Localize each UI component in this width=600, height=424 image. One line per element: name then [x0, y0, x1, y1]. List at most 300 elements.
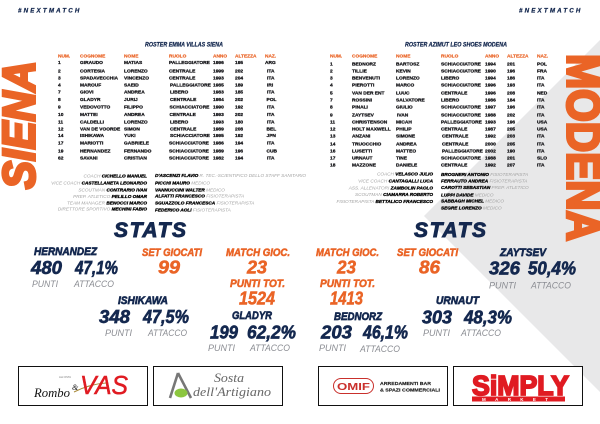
- roster table: Modena: HOLT MAXWELL: [352, 126, 391, 132]
- roster table: Modena: USA: [537, 126, 548, 132]
- roster table: Siena: 9: [58, 104, 61, 110]
- roster table: Modena: PALLEGGIATORE: [441, 119, 483, 125]
- roster table: Siena: 1993: [213, 76, 224, 82]
- roster table: Siena: GABRIELE: [124, 140, 150, 146]
- roster table: Modena: BENVENUTI: [352, 75, 381, 81]
- roster table: Modena: LUSETTI: [352, 148, 373, 154]
- staff list: Modena right: [441, 172, 529, 211]
- roster table: Modena: LUUC: [396, 90, 410, 96]
- roster table: Siena: 196: [235, 148, 243, 154]
- table header: Siena: RUOLO: [169, 53, 187, 59]
- player stat: Hernandez: ATTACCO: [73, 279, 114, 289]
- player stat: Ishikawa: PUNTI: [105, 328, 132, 338]
- staff list: Siena left: TEAM MANAGER BENOCCI MARCO: [67, 201, 147, 206]
- roster table: Modena: USA: [537, 119, 548, 125]
- roster table: Siena: 14: [58, 133, 64, 139]
- roster table: Siena: CENTRALE: [170, 97, 197, 103]
- roster table: Siena: 208: [235, 126, 243, 132]
- staff list: Siena left: DIRETTORE SPORTIVO MECHINI FABIO: [58, 207, 147, 212]
- team stat: Modena sets played: SET GIOCATI: [397, 247, 459, 259]
- roster table: Siena: 1996: [213, 60, 224, 66]
- table header: Siena: NUM.: [58, 53, 70, 59]
- roster table: Siena: 189: [235, 82, 243, 88]
- roster table: Modena: 8: [330, 104, 333, 110]
- team stat: Modena sets played: [397, 247, 459, 278]
- roster table: Modena: ITA: [537, 148, 545, 154]
- roster table: Siena: SIMON: [124, 126, 140, 132]
- roster table: Modena: LIBERO: [441, 75, 460, 81]
- roster table: Modena: 1987: [485, 126, 496, 132]
- player stat: Gladyr: 199: [210, 322, 238, 342]
- roster table: Modena: 7: [330, 97, 333, 103]
- roster table: Modena: 193: [507, 82, 515, 88]
- roster table: Siena: 1: [58, 60, 61, 66]
- roster table: Modena: 1994: [485, 75, 496, 81]
- table header: Siena: [58, 53, 276, 59]
- roster table: Siena: 202: [235, 68, 243, 74]
- roster table: Siena: POL: [266, 97, 276, 103]
- roster table: Modena: 1988: [485, 155, 496, 161]
- roster table: Modena: [330, 53, 548, 168]
- roster table: Siena: 204: [235, 76, 243, 82]
- roster table: Modena: ITA: [537, 75, 545, 81]
- sponsor logo: Simply Market: MARKET: [482, 397, 548, 402]
- player stat: Hernandez: HERNANDEZ: [34, 246, 98, 258]
- roster table: Siena: CORTESIA: [80, 68, 106, 74]
- roster table: Siena: LIBERO: [170, 90, 189, 96]
- roster table: Siena: ITA: [267, 104, 275, 110]
- roster table: Modena: LORENZO: [396, 75, 420, 81]
- staff list: Siena left: SCOUTMAN CONTRARIO IVAN: [78, 188, 148, 193]
- roster table: Siena: 1990: [213, 104, 224, 110]
- player stat: Ishikawa: [99, 295, 189, 338]
- table header: Modena: RUOLO: [441, 53, 459, 59]
- roster table: Siena: 180: [235, 120, 243, 126]
- roster table: Modena: ITA: [537, 97, 545, 103]
- player stat: Bednorz: [319, 311, 408, 354]
- roster table: Siena: 185: [235, 90, 243, 96]
- staff list: Siena right: [154, 173, 306, 213]
- roster table: Siena: [58, 53, 277, 161]
- stats heading: Modena: STATS: [414, 219, 486, 242]
- roster table: Modena: TILLIE: [352, 68, 368, 74]
- roster table: Siena: 1989: [213, 148, 224, 154]
- staff list: Modena right: SABBAGH MICHEL MEDICO: [441, 199, 504, 204]
- roster table: Siena: ITA: [267, 68, 275, 74]
- roster table: Siena: CENTRALE: [169, 76, 196, 82]
- player stat: Bednorz: BEDNORZ: [334, 311, 383, 323]
- roster table: Siena: GIRAUDO: [80, 60, 103, 66]
- sponsor logo: Sosta dell'Artigiano: [154, 366, 282, 406]
- roster table: Siena: HERNANDEZ: [80, 148, 110, 154]
- roster table: Siena: 17: [58, 140, 64, 146]
- team stat: Siena matches played: 23: [246, 258, 267, 278]
- roster table: Modena: 1986: [485, 97, 496, 103]
- team stat: Siena sets played: [142, 247, 203, 278]
- roster table: Siena: SAEID: [124, 82, 139, 88]
- roster table: Modena: 9: [330, 112, 333, 118]
- staff list: Modena left: FISIOTERAPISTA BETTALICO FRANCESCO: [336, 199, 433, 204]
- roster table: Siena: JURIJ: [124, 97, 138, 103]
- roster table: Siena: GLADYR: [80, 97, 101, 103]
- roster title: Modena: ROSTER AZIMUT LEO SHOES MODENA: [405, 43, 507, 49]
- roster table: Modena: TRUOCCHIO: [352, 141, 382, 147]
- player stat: Hernandez: 480: [30, 258, 62, 278]
- team stat: Modena sets played: 86: [419, 258, 441, 278]
- roster table: Siena: 19: [58, 148, 64, 154]
- roster table: Modena: 202: [507, 112, 515, 118]
- sponsor logo: OMIF: ARREDAMENTI BAR: [380, 381, 432, 386]
- roster table: Siena: MATIAS: [124, 60, 143, 66]
- player stat: Zaytsev: 326: [489, 258, 521, 278]
- roster table: Siena: CUB: [266, 148, 277, 154]
- table header: Modena: [330, 53, 548, 59]
- roster table: Siena: MATTEI: [80, 112, 98, 118]
- sponsor logo: Sosta dell'Artigiano: Sosta: [214, 370, 245, 385]
- roster table: Modena: GIULIO: [396, 104, 413, 110]
- roster table: Siena: IRI: [267, 82, 274, 88]
- table header: Modena: COGNOME: [352, 53, 378, 59]
- roster table: Modena: 14: [330, 141, 336, 147]
- sponsor logo: Simply Market: [454, 366, 582, 406]
- player stat: Bednorz: PUNTI: [319, 343, 346, 353]
- table header: Siena: NOME: [124, 53, 139, 59]
- roster table: Modena: CHRISTENSON: [352, 119, 388, 125]
- roster table: Modena: ZAYTSEV: [352, 112, 375, 118]
- player stat: Ishikawa: 47,5%: [142, 307, 189, 327]
- team stat: Siena sets played: SET GIOCATI: [142, 247, 203, 259]
- staff list: Siena left: [51, 174, 148, 212]
- roster table: Siena: 12: [58, 126, 64, 132]
- roster table: Modena: SIMONE: [396, 133, 416, 139]
- roster table: Modena: 207: [507, 162, 515, 168]
- roster table: Modena: CENTRALE: [441, 126, 468, 132]
- roster table: Modena: SALVATORE: [396, 97, 425, 103]
- roster table: Siena: VEDOVOTTO: [80, 104, 111, 110]
- roster table: Siena: 7: [58, 90, 61, 96]
- roster table: Siena: CENTRALE: [170, 112, 197, 118]
- roster table: Siena: 192: [235, 133, 243, 139]
- roster table: Modena: 203: [507, 133, 515, 139]
- roster table: Siena: SCHIACCIATORE: [169, 148, 210, 154]
- roster table: Siena: ARG: [265, 60, 276, 66]
- roster table: Modena: ITA: [537, 162, 545, 168]
- roster table: Modena: 1992: [485, 133, 496, 139]
- roster table: Modena: SCHIACCIATORE: [441, 68, 482, 74]
- roster table: Siena: PALLEGGIATORE: [170, 82, 212, 88]
- roster table: Modena: 2002: [485, 148, 496, 154]
- roster table: Siena: 202: [235, 112, 243, 118]
- team stat: Siena sets played: 99: [158, 258, 180, 278]
- roster table: Modena: 201: [507, 61, 515, 67]
- roster table: Siena: LORENZO: [124, 68, 148, 74]
- player stat: Ishikawa: ATTACCO: [147, 328, 187, 338]
- player stat: Urnaut: PUNTI: [423, 328, 450, 338]
- staff list: Siena left: PREP. ATLETICO PELILLO OMAR: [73, 194, 148, 199]
- player stat: Ishikawa: 348: [99, 307, 130, 327]
- roster table: Modena: 1990: [485, 68, 496, 74]
- roster table: Siena: VAN DE VOORDE: [80, 126, 121, 132]
- roster table: Modena: 4: [330, 82, 333, 88]
- roster table: Modena: 13: [330, 133, 336, 139]
- roster table: Siena: 11: [58, 120, 63, 126]
- roster table: Modena: 2: [330, 68, 333, 74]
- roster table: Modena: 196: [507, 119, 515, 125]
- roster table: Siena: CENTRALE: [169, 68, 196, 74]
- roster table: Modena: SCHIACCIATORE: [441, 104, 482, 110]
- roster table: Siena: SCHIACCIATORE: [170, 104, 210, 110]
- roster table: Modena: LIBERO: [441, 97, 460, 103]
- roster table: Siena: SAVANI: [80, 156, 98, 162]
- staff list: Siena right: VANNUCCINI WALTER MEDICO: [155, 188, 225, 193]
- team stat: Modena matches played: 23: [336, 258, 356, 278]
- team stat: Modena total points: [320, 278, 375, 308]
- roster table: Siena: CRISTIAN: [124, 156, 147, 162]
- roster table: Modena: URNAUT: [352, 155, 372, 161]
- table header: Modena: NAZ.: [537, 53, 548, 59]
- roster table: Siena: SCHIACCIATORE: [169, 140, 210, 146]
- staff list: Modena left: COACH VELASCO JULIO: [377, 172, 433, 177]
- roster table: Siena: ANDREA: [124, 90, 145, 96]
- staff list: Modena left: VICE COACH CANTAGALLI LUCA: [358, 179, 434, 184]
- sponsor logo: OMIF: OMIF: [337, 382, 370, 393]
- sponsor logo: Rombo & Vas: [18, 366, 148, 406]
- roster table: Modena: CENTRALE: [442, 141, 469, 147]
- roster table: Modena: 1994: [485, 61, 496, 67]
- hashtag left: #NEXTMATCH: [18, 8, 82, 15]
- roster table: Siena: FILIPPO: [124, 104, 143, 110]
- roster table: Siena: 2: [58, 68, 61, 74]
- sponsor logo: Rombo & Vas: &: [72, 383, 79, 392]
- sponsor logo: Sosta dell'Artigiano: dell'Artigiano: [193, 384, 272, 399]
- roster table: Modena: SCHIACCIATORE: [441, 112, 482, 118]
- roster table: Modena: 17: [330, 155, 336, 161]
- team stat: Siena total points: 1524: [239, 288, 275, 308]
- staff list: Modena right: CAROTTI SEBASTIAN PREP. ATLETICO: [441, 185, 529, 190]
- roster table: Siena: GIOVI: [80, 90, 94, 96]
- roster table: Modena: 1997: [485, 104, 496, 110]
- player stat: Gladyr: GLADYR: [232, 310, 272, 322]
- roster table: Modena: 5: [330, 90, 333, 96]
- roster table: Modena: FRA: [537, 68, 547, 74]
- player stat: Urnaut: 303: [422, 308, 452, 328]
- roster table: Modena: 184: [507, 97, 515, 103]
- roster table: Modena: MICAH: [396, 119, 412, 125]
- player stat: Bednorz: ATTACCO: [359, 344, 400, 354]
- roster table: Siena: 1995: [213, 133, 224, 139]
- roster table: Siena: 3: [58, 76, 61, 82]
- roster table: Siena: 1999: [213, 68, 224, 74]
- team stat: Siena total points: PUNTI TOT.: [230, 278, 285, 290]
- roster table: Modena: 205: [507, 126, 515, 132]
- roster table: Modena: 190: [507, 148, 515, 154]
- table header: Modena: ALTEZZA: [507, 53, 529, 59]
- roster table: Siena: 1983: [213, 90, 224, 96]
- roster table: Modena: CENTRALE: [441, 90, 468, 96]
- roster table: Modena: 196: [507, 68, 515, 74]
- roster table: Modena: 205: [507, 141, 515, 147]
- roster table: Modena: PINALI: [352, 104, 369, 110]
- team stat: Modena matches played: [316, 247, 379, 278]
- team stat: Siena matches played: [226, 247, 290, 278]
- roster table: Siena: LORENZO: [124, 120, 148, 126]
- roster table: Siena: 194: [235, 156, 243, 162]
- team stat: Siena total points: [230, 278, 285, 308]
- roster table: Siena: MARIOTTI: [80, 140, 104, 146]
- staff list: Modena right: FERRAUTO ANDREA FISIOTERAPISTA: [441, 179, 527, 184]
- roster table: Modena: ITA: [537, 104, 545, 110]
- roster table: Modena: MARCO: [396, 82, 415, 88]
- roster table: Siena: ISHIKAWA: [80, 133, 104, 139]
- player stat: Hernandez: [30, 246, 118, 289]
- table header: Modena: NUM.: [330, 53, 342, 59]
- roster table: Modena: SCHIACCIATORE: [441, 155, 482, 161]
- player stat: Urnaut: [422, 295, 512, 338]
- roster table: Siena: JPN: [266, 133, 276, 139]
- roster table: Siena: CENTRALE: [170, 126, 197, 132]
- player stat: Zaytsev: 50,4%: [528, 258, 576, 278]
- player stat: Zaytsev: ZAYTSEV: [499, 247, 548, 259]
- roster table: Modena: ANDREA: [396, 141, 417, 147]
- roster table: Modena: SCHIACCIATORE: [441, 82, 482, 88]
- roster table: Siena: 1982: [213, 156, 224, 162]
- roster table: Modena: TINE: [396, 155, 408, 161]
- roster table: Siena: 195: [235, 60, 243, 66]
- table header: Siena: ALTEZZA: [235, 53, 257, 59]
- roster table: Siena: ITA: [267, 120, 275, 126]
- player stat: Urnaut: ATTACCO: [460, 328, 501, 338]
- roster table: Modena: KEVIN: [396, 68, 411, 74]
- team stat: Modena total points: PUNTI TOT.: [320, 278, 375, 290]
- roster table: Siena: ITA: [267, 76, 275, 82]
- player stat: Hernandez: PUNTI: [32, 279, 58, 289]
- roster table: Siena: 192: [235, 104, 243, 110]
- roster table: Siena: 62: [58, 156, 64, 162]
- roster table: Modena: POL: [537, 61, 547, 67]
- player stat: Bednorz: 203: [320, 322, 352, 342]
- table header: Modena: ANNO: [485, 53, 499, 59]
- staff list: Siena right: D'ASCENZI FLAVIO R. TEC.-SCIENTIFICO DELLO STAFF SANITARIO: [155, 173, 306, 178]
- roster table: Siena: PALLEGGIATORE: [169, 60, 211, 66]
- roster table: Modena: DANIELE: [396, 162, 418, 168]
- player stat: Urnaut: URNAUT: [436, 295, 480, 307]
- table header: Siena: NAZ.: [265, 53, 276, 59]
- table header: Siena: COGNOME: [80, 53, 106, 59]
- roster table: Siena: SCHIACCIATORE: [170, 133, 211, 139]
- roster table: Modena: 186: [507, 75, 515, 81]
- roster table: Modena: VAN DER ENT: [352, 90, 385, 96]
- staff list: Siena right: FEDERICO AOLI FISIOTERAPISTA: [155, 208, 231, 213]
- roster table: Modena: ROSSINI: [352, 97, 373, 103]
- roster table: Modena: 1: [330, 61, 333, 67]
- roster table: Siena: ITA: [267, 112, 275, 118]
- roster table: Siena: LIBERO: [170, 120, 189, 126]
- roster table: Modena: 18: [330, 162, 336, 168]
- roster table: Siena: 1989: [213, 126, 224, 132]
- stats heading: Siena: STATS: [114, 219, 186, 242]
- roster table: Siena: 4: [58, 82, 61, 88]
- roster table: Siena: SPADAVECCHIA: [80, 76, 119, 82]
- roster table: Modena: SLO: [537, 155, 547, 161]
- player stat: Gladyr: 62,2%: [247, 322, 296, 342]
- roster table: Modena: 3: [330, 75, 333, 81]
- player stat: Bednorz: 46,1%: [362, 322, 408, 342]
- roster table: Siena: MAROUF: [80, 82, 101, 88]
- staff list: Siena left: COACH CICHELLO MANUEL: [83, 174, 147, 179]
- roster table: Modena: 1996: [485, 90, 496, 96]
- table header: Siena: ANNO: [213, 53, 227, 59]
- roster table: Modena: SCHIACCIATORE: [441, 61, 482, 67]
- roster table: Siena: 202: [235, 97, 243, 103]
- team stat: Siena matches played: MATCH GIOC.: [226, 247, 290, 259]
- roster table: Modena: PALLEGGIATORE: [442, 148, 484, 154]
- table header: Modena: NOME: [396, 53, 411, 59]
- player stat: Gladyr: [208, 310, 296, 353]
- roster table: Modena: 16: [330, 148, 336, 154]
- sponsor logo: OMIF: & SPAZI COMMERCIALI: [380, 388, 440, 392]
- sponsor logo: Rombo & Vas: ALL'OSTA: [59, 375, 71, 379]
- roster title: Siena: ROSTER EMMA VILLAS SIENA: [145, 43, 223, 49]
- player stat: Gladyr: PUNTI: [208, 343, 235, 353]
- player stat: Gladyr: ATTACCO: [249, 343, 290, 353]
- roster table: Modena: 208: [507, 90, 515, 96]
- roster table: Modena: 201: [507, 155, 515, 161]
- staff list: Modena left: SCOUTMAN CIAMARRA ROBERTO: [355, 192, 433, 197]
- staff list: Siena right: ALFATTI FRANCESCO FISIOTERAPISTA: [154, 194, 244, 199]
- roster table: Siena: BEL: [266, 126, 276, 132]
- roster table: Modena: 2000: [485, 141, 496, 147]
- staff list: Modena right: SEGRE LORENZO MEDICO: [441, 206, 502, 211]
- roster table: Modena: PIEROTTI: [352, 82, 375, 88]
- roster table: Modena: 12: [330, 126, 336, 132]
- staff list: Siena right: SGUAZZOLO FRANCESCA FISIOTERAPISTA: [155, 201, 254, 206]
- player stat: Ishikawa: ISHIKAWA: [118, 295, 168, 307]
- roster table: Siena: 1993: [213, 112, 224, 118]
- roster table: Modena: ITA: [537, 141, 545, 147]
- roster table: Siena: YUKI: [124, 133, 136, 139]
- roster table: Modena: MAZZONE: [352, 162, 377, 168]
- player stat: Zaytsev: ATTACCO: [530, 280, 571, 290]
- roster table: Siena: 1985: [213, 82, 224, 88]
- roster table: Siena: 10: [58, 112, 64, 118]
- roster table: Siena: ITA: [267, 156, 275, 162]
- staff list: Siena left: VICE COACH CASTELLANETA LEONARDO: [51, 181, 147, 186]
- roster table: Siena: 1993: [213, 120, 224, 126]
- staff list: Modena right: LUPPI DAVIDE MEDICO: [441, 193, 494, 198]
- sponsor logo: Rombo & Vas: VAS: [80, 370, 129, 400]
- roster table: Siena: FERNANDO: [124, 148, 152, 154]
- roster table: Siena: 194: [235, 140, 243, 146]
- roster table: Modena: PHILIP: [396, 126, 412, 132]
- roster table: Siena: 8: [58, 97, 61, 103]
- roster table: Modena: ITA: [537, 82, 545, 88]
- player stat: Urnaut: 48,3%: [463, 308, 512, 328]
- roster table: Modena: IVAN: [397, 112, 409, 118]
- roster table: Siena: ITA: [267, 140, 275, 146]
- player stat: Hernandez: 47,1%: [74, 258, 118, 278]
- roster table: Modena: BEDNORZ: [352, 61, 376, 67]
- roster table: Siena: 1984: [213, 97, 224, 103]
- staff list: Siena right: PICCHI MAURO MEDICO: [155, 181, 210, 186]
- roster table: Modena: CENTRALE: [442, 133, 469, 139]
- staff list: Modena left: ASS. ALLENATORI ZAMBOLIN PAOLO: [348, 185, 433, 190]
- roster table: Modena: ANZANI: [352, 133, 371, 139]
- roster table: Siena: VINCENZO: [124, 76, 149, 82]
- roster table: Modena: 1996: [485, 82, 496, 88]
- roster table: Siena: SCHIACCIATORE: [169, 156, 210, 162]
- hashtag right: #NEXTMATCH: [519, 8, 583, 15]
- team stat: Modena matches played: MATCH GIOC.: [316, 247, 379, 259]
